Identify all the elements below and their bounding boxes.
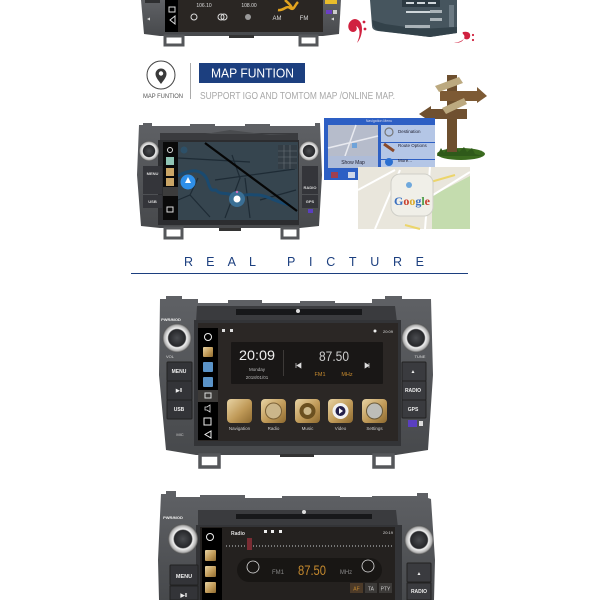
screen: home launcher: Navigation bbox=[229, 426, 251, 431]
navigation menu panel: More... bbox=[398, 158, 412, 163]
stereo unit: radio screen (cropped top): 108.00 bbox=[241, 3, 257, 9]
icon caption: MAP FUNTION bbox=[143, 93, 183, 100]
stereo unit: home screen photo: PWR/MOD bbox=[161, 317, 181, 322]
screen: home launcher bbox=[198, 323, 398, 441]
stereo unit: radio screen photo (cropped bottom): ▲ bbox=[417, 571, 421, 577]
screen: radio tuner: MHz bbox=[340, 570, 352, 576]
screen: navigation map bbox=[163, 142, 298, 220]
stereo unit: radio screen photo (cropped bottom): PWR/MOD bbox=[163, 515, 183, 520]
screen: radio tuner: AF bbox=[353, 586, 360, 592]
stereo unit: home screen photo: MENU bbox=[172, 369, 187, 375]
subtitle: SUPPORT IGO AND TOMTOM MAP /ONLINE MAP. bbox=[200, 91, 395, 102]
stereo unit: home screen photo: VOL bbox=[166, 354, 175, 359]
section title: real picture bbox=[184, 255, 424, 269]
icon: map pin in circle bbox=[147, 61, 175, 89]
navigation menu panel: Destination bbox=[398, 129, 421, 134]
stereo unit: map screen: GPS bbox=[306, 199, 315, 204]
icon: red bass clef left bbox=[348, 19, 366, 43]
stereo unit: radio screen (cropped top) bbox=[141, 0, 341, 45]
stereo unit: map screen: USB bbox=[148, 199, 157, 204]
screen: home launcher: MHz bbox=[341, 372, 353, 378]
stereo unit: home screen photo: MIC bbox=[176, 432, 184, 437]
screen: radio tuner: 20:19 bbox=[383, 530, 394, 535]
screen: home launcher: Video bbox=[335, 426, 347, 431]
screen: home launcher: FM1 bbox=[314, 372, 326, 378]
stereo unit: map screen bbox=[137, 123, 322, 238]
stereo unit: radio screen photo (cropped bottom): RADIO bbox=[411, 589, 427, 595]
stereo unit: radio screen photo (cropped bottom): ▶‖ bbox=[180, 592, 188, 599]
screen: home launcher: Settings bbox=[366, 426, 383, 431]
section title: real picture: PICTURE bbox=[287, 255, 424, 269]
screen: home launcher: Monday bbox=[249, 367, 266, 372]
section title: real picture: REAL bbox=[184, 255, 256, 269]
navigation menu panel bbox=[324, 118, 435, 180]
heading badge: map funtion bbox=[199, 63, 305, 83]
stereo unit: radio screen photo (cropped bottom): MENU bbox=[176, 574, 192, 580]
stereo unit: home screen photo: USB bbox=[174, 407, 185, 413]
google maps card: Google bbox=[394, 194, 431, 208]
navigation menu panel: Show Map bbox=[341, 160, 365, 166]
wooden signpost bbox=[419, 75, 487, 160]
screen: radio tuner: Radio bbox=[231, 531, 245, 537]
navigation menu panel: Route Options bbox=[398, 143, 428, 148]
stereo unit: radio screen (cropped top): 106.10 bbox=[196, 3, 212, 9]
icon: red bass clef right bbox=[454, 32, 474, 43]
stereo unit: home screen photo: ▶‖ bbox=[175, 388, 183, 394]
screen: home launcher: Radio bbox=[268, 426, 280, 431]
stereo unit: home screen photo: ▲ bbox=[411, 369, 415, 375]
stereo unit: home screen photo bbox=[159, 296, 433, 467]
stereo unit: radio screen (cropped top): FM bbox=[300, 16, 308, 22]
screen: radio tuner: TA bbox=[368, 586, 375, 592]
screen: radio tuner bbox=[200, 527, 395, 600]
screen: home launcher: 20:09 bbox=[383, 329, 394, 334]
screen: radio tuner: PTY bbox=[381, 586, 391, 592]
screen: home launcher: 20:09 bbox=[239, 347, 275, 363]
stereo unit: home screen photo: TUNE bbox=[415, 354, 426, 359]
screen: radio tuner: FM1 bbox=[272, 570, 285, 576]
stereo unit: radio screen (cropped top): AM bbox=[272, 16, 282, 22]
screen: home launcher: 87.50 bbox=[319, 349, 349, 364]
stereo unit: radio screen photo (cropped bottom) bbox=[158, 491, 435, 600]
stereo unit: home screen photo: RADIO bbox=[405, 388, 421, 394]
screen: radio tuner: 87.50 bbox=[298, 563, 326, 578]
stereo unit: home screen photo: GPS bbox=[408, 407, 419, 413]
photo: portable radio bbox=[370, 0, 457, 37]
screen: home launcher: Music bbox=[302, 426, 314, 431]
stereo unit: map screen: MENU bbox=[147, 171, 158, 176]
stereo unit: map screen: RADIO bbox=[304, 185, 316, 190]
navigation menu panel: Navigation Menu bbox=[366, 119, 392, 123]
screen: home launcher: 2018/01/01 bbox=[246, 375, 269, 380]
heading badge: map funtion: MAP FUNTION bbox=[211, 66, 294, 80]
google maps card bbox=[358, 167, 470, 229]
